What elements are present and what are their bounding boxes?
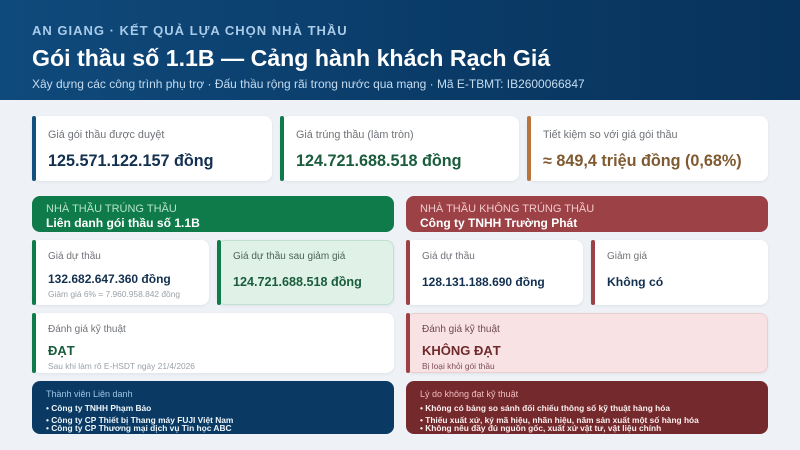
members list: • Công ty CP Thương mại dịch vụ Tin học ABC <box>46 423 232 433</box>
winner header <box>32 196 394 232</box>
card: loser bid price: 128.131.188.690 đồng <box>422 275 545 289</box>
card: loser bid price: Giá dự thầu <box>422 251 475 262</box>
panel: consortium members <box>32 381 394 434</box>
card: winning price: 124.721.688.518 đồng <box>296 152 462 170</box>
winner name: Liên danh gói thầu số 1.1B <box>46 216 200 230</box>
card: approved package price: Giá gói thầu được duyệt <box>48 129 164 141</box>
card: winner technical result: Sau khi làm rõ E-HSDT ngày 21/4/2026 <box>48 361 195 371</box>
reasons list <box>420 403 699 433</box>
loser name: Công ty TNHH Trường Phát <box>420 216 577 230</box>
card: loser discount: Giảm giá <box>607 251 647 262</box>
card: savings <box>527 116 768 181</box>
members heading: Thành viên Liên danh <box>46 389 133 399</box>
card: approved package price: 125.571.122.157 đồng <box>48 152 214 170</box>
card: approved package price <box>32 116 272 181</box>
reasons list: • Không có bảng so sánh đối chiếu thông số kỹ thuật hàng hóa <box>420 403 670 413</box>
title: Gói thầu số 1.1B — Cảng hành khách Rạch Giá <box>32 45 550 71</box>
card: loser discount <box>591 240 768 305</box>
reasons list: • Không nêu đầy đủ nguồn gốc, xuất xứ vật tư, vật liệu chính <box>420 423 661 433</box>
members list: • Công ty CP Thiết bị Thang máy FUJI Việt Nam <box>46 415 233 425</box>
card: loser technical result: KHÔNG ĐẠT <box>422 343 501 358</box>
card: winner technical result <box>32 313 394 373</box>
card: winner bid price: 132.682.647.360 đồng <box>48 272 171 286</box>
header banner <box>0 0 800 100</box>
loser header <box>406 196 768 232</box>
subtitle: Xây dựng các công trình phụ trợ · Đấu thầu rộng rãi trong nước qua mạng · Mã E-TBMT: IB2600066847 <box>32 77 585 91</box>
eyebrow: AN GIANG · KẾT QUẢ LỰA CHỌN NHÀ THẦU <box>32 23 348 38</box>
card: loser technical result: Bị loại khỏi gói thầu <box>422 361 495 371</box>
winner label: NHÀ THẦU TRÚNG THẦU <box>46 203 177 215</box>
card: winner price after discount <box>217 240 394 305</box>
card: loser technical result <box>406 313 768 373</box>
card: winning price <box>280 116 519 181</box>
card: savings: Tiết kiệm so với giá gói thầu <box>543 129 678 141</box>
reasons heading: Lý do không đạt kỹ thuật <box>420 389 518 399</box>
card: loser technical result: Đánh giá kỹ thuật <box>422 324 500 335</box>
reasons list: • Thiếu xuất xứ, ký mã hiệu, nhãn hiệu, năm sản xuất một số hàng hóa <box>420 415 699 425</box>
panel: reasons for technical failure <box>406 381 768 434</box>
card: winner price after discount: 124.721.688.518 đồng <box>233 275 362 289</box>
card: winner technical result: Đánh giá kỹ thuật <box>48 324 126 335</box>
card: winner price after discount: Giá dự thầu sau giảm giá <box>233 251 345 262</box>
card: winner technical result: ĐẠT <box>48 343 75 358</box>
card: winner bid price: Giảm giá 6% = 7.960.958.842 đồng <box>48 289 180 299</box>
members list <box>46 403 233 433</box>
card: loser discount: Không có <box>607 275 663 289</box>
card: winner bid price: Giá dự thầu <box>48 251 101 262</box>
card: winner bid price <box>32 240 209 305</box>
card: savings: ≈ 849,4 triệu đồng (0,68%) <box>543 152 742 170</box>
card: winning price: Giá trúng thầu (làm tròn) <box>296 129 414 141</box>
card: loser bid price <box>406 240 583 305</box>
loser label: NHÀ THẦU KHÔNG TRÚNG THẦU <box>420 203 594 215</box>
members list: • Công ty TNHH Phạm Bảo <box>46 403 151 413</box>
